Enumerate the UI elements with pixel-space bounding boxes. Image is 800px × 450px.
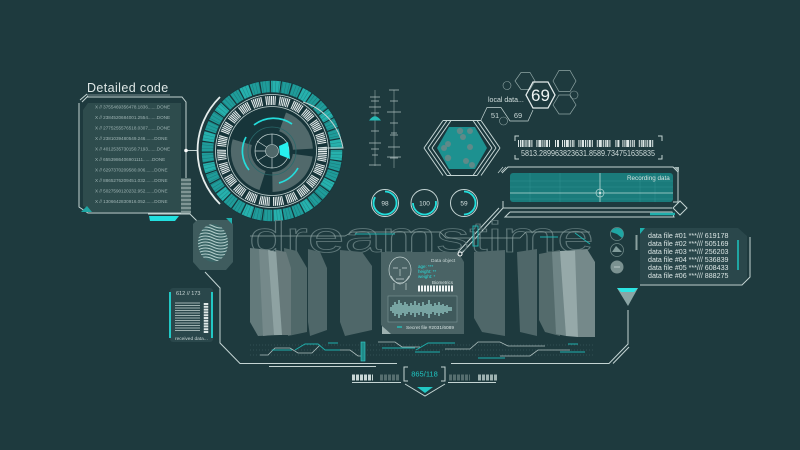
stacked level bars <box>181 180 191 212</box>
text block: code rows: X // 2381039480549.246.......DONE <box>95 136 168 141</box>
highlighted segment outline <box>303 102 343 148</box>
lower frame <box>458 201 674 253</box>
level bar <box>204 303 208 333</box>
counter value: 865/118 <box>411 370 438 378</box>
hexagon cluster: 69 <box>514 111 522 120</box>
data sheets left <box>250 248 372 336</box>
status discs <box>610 228 624 274</box>
panel: data files <box>636 228 750 285</box>
serial line: Secret file #2031/6089 <box>406 325 454 331</box>
cyan arcs <box>242 118 298 183</box>
triangle marker <box>617 288 638 306</box>
data object card <box>381 252 464 334</box>
gauge 98: 98 <box>381 200 389 208</box>
hexagon dots <box>441 128 475 168</box>
barcode number: 5813.289963823631.8589.734751635835 <box>521 148 655 158</box>
fingerprint panel <box>193 218 233 270</box>
teal fields: height: ** <box>418 269 437 274</box>
dial disc <box>201 80 343 222</box>
data file list: data file #03 ***/// 256203 <box>648 248 729 256</box>
card barcode <box>418 286 453 292</box>
white tick ring <box>222 100 322 202</box>
data file list: data file #01 ***/// 619178 <box>648 232 729 240</box>
cyan tab <box>149 216 179 221</box>
text lines <box>175 303 200 330</box>
teal screen <box>510 173 673 202</box>
biometric label: Biometrics <box>432 280 454 285</box>
watermark: dreamstime <box>249 213 594 262</box>
panel: received data <box>170 288 213 342</box>
text block: code rows: X // 5027590120232.952.......DONE <box>95 188 168 194</box>
fingerprint <box>198 224 228 262</box>
panel: detailed code <box>79 81 197 221</box>
waveform <box>388 296 457 322</box>
teal segment ring <box>208 86 336 216</box>
gray sector ring <box>232 111 312 191</box>
progress strips <box>352 378 497 382</box>
barcode <box>518 140 655 147</box>
card title: Data object <box>431 258 456 264</box>
text block: code rows: X // 8865276209451.032.......DONE <box>95 178 168 183</box>
text block: code rows: X // 2775255576518.0307.......DONE <box>95 126 170 130</box>
teal fields: age: *** <box>418 264 434 269</box>
gauge 100: 100 <box>419 200 430 208</box>
text block: code rows: X // 3755469356478.1836.......DONE <box>95 104 170 110</box>
barcode block <box>515 136 662 159</box>
data file list: data file #02 ***/// 505169 <box>648 240 729 248</box>
teal fields <box>418 264 437 279</box>
infographic canvas <box>78 70 750 397</box>
slider marker <box>369 116 381 120</box>
data file list: data file #04 ***/// 536839 <box>648 256 729 264</box>
face <box>389 257 411 290</box>
text block: code rows: X // 2384520684001.2554.......DONE <box>95 115 170 120</box>
data file list: data file #06 ***/// 888275 <box>648 272 729 280</box>
left bracket arc <box>198 97 220 204</box>
cyan wedge <box>279 142 290 159</box>
hexagon cluster <box>481 70 578 125</box>
panel: recording data <box>458 167 687 253</box>
counter: 612 // 173 <box>176 291 200 297</box>
heading: detailed code: Detailed code <box>87 81 169 95</box>
text block: code rows: X // 4012535730150.7193.......DONE <box>95 146 170 152</box>
gauge 59: 59 <box>460 200 468 208</box>
data file list: data file #05 ***/// 608433 <box>648 264 729 272</box>
data sheets right <box>474 249 595 337</box>
text block: code rows <box>95 104 170 204</box>
diamond node <box>673 201 687 215</box>
text block: code rows: X // 1306642830916.052.......DONE <box>95 199 168 204</box>
text block: code rows: X // 6297370209580.006.......DONE <box>95 168 168 172</box>
teal hexagon <box>437 127 487 169</box>
lower circuit band <box>250 342 595 361</box>
text block: code rows: X // 6553986406901111.......DONE <box>95 157 165 162</box>
value 69: 69 <box>531 86 550 105</box>
data file list <box>648 232 729 280</box>
hub <box>255 134 289 168</box>
received label: received data... <box>175 336 208 342</box>
local data label: local data... <box>488 97 524 104</box>
radial dial <box>184 80 343 222</box>
hexagon scanner <box>424 120 500 176</box>
upper circuit line <box>250 226 590 256</box>
chevron <box>405 384 445 396</box>
recording label: Recording data <box>627 175 670 182</box>
gauges <box>372 190 478 216</box>
counter badge <box>404 367 445 396</box>
values 51 and 69: 51 <box>491 111 499 120</box>
main frame line <box>205 272 629 366</box>
teal fields: weight: * <box>418 274 436 279</box>
vertical sliders <box>369 90 401 168</box>
